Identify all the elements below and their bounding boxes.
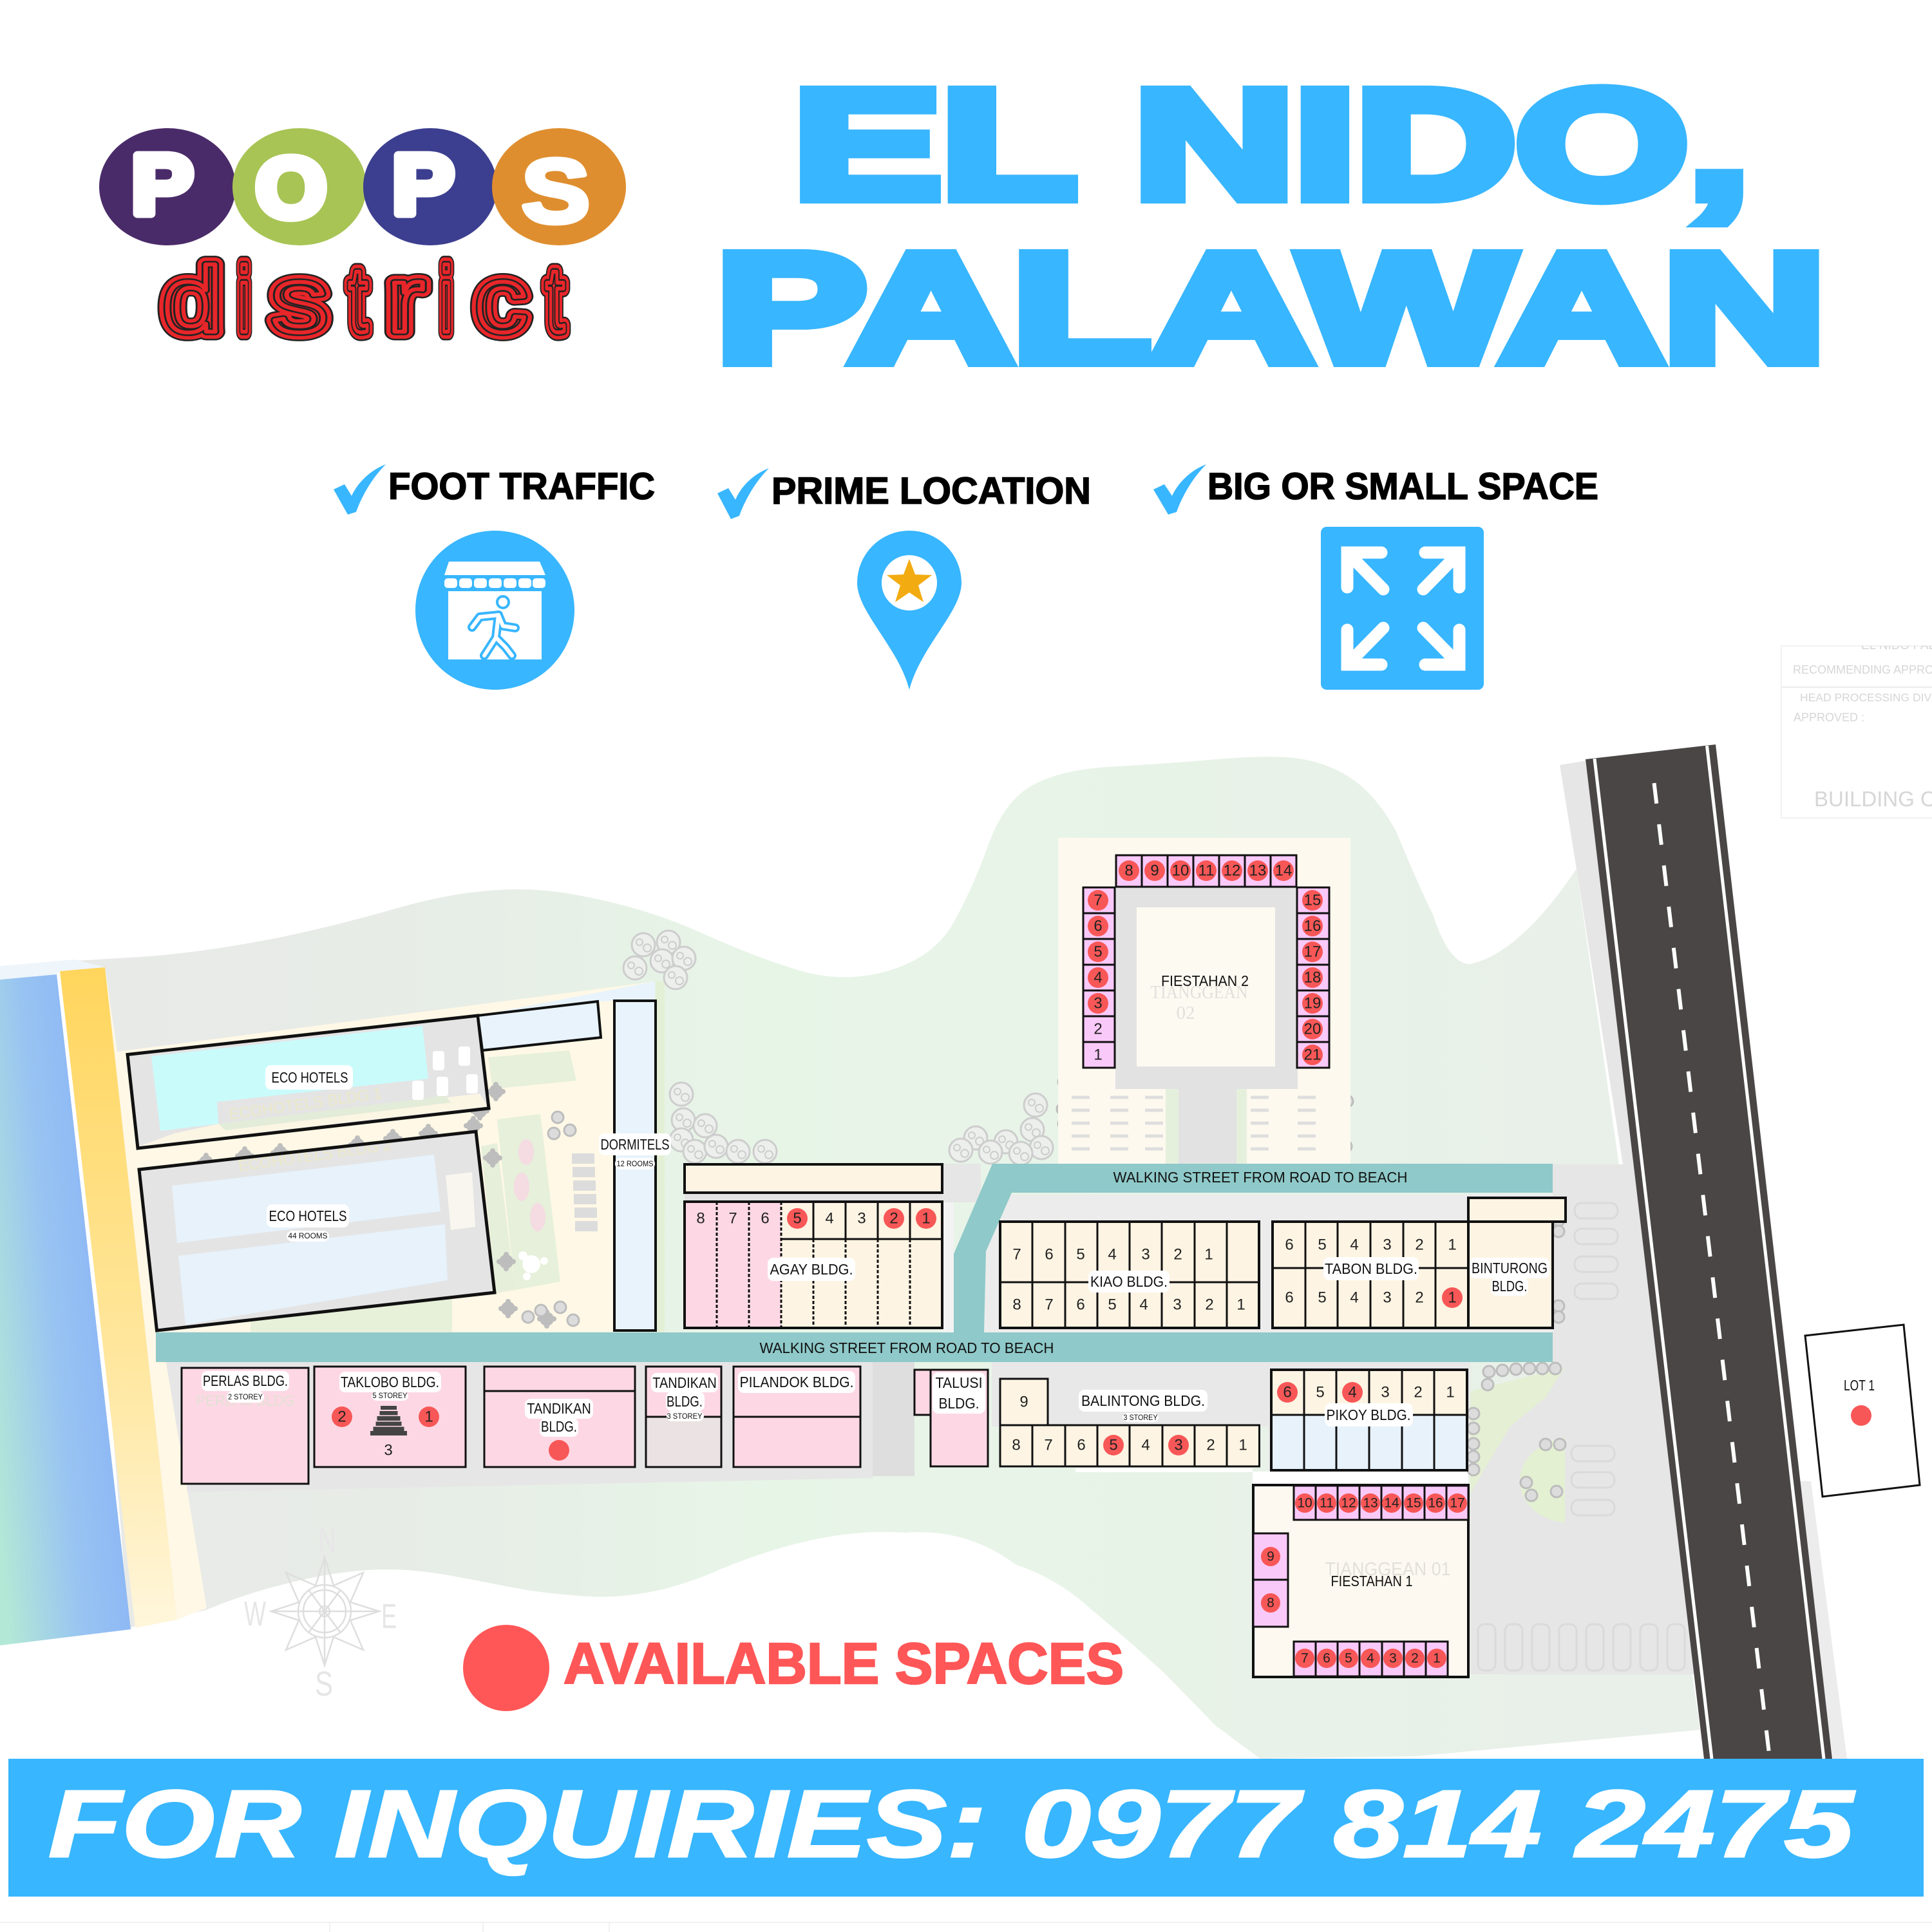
logo word: district: r xyxy=(387,248,424,352)
stalls: top row 8-14: 14 xyxy=(1275,862,1292,880)
logo word: district: t xyxy=(348,248,368,352)
dormitels xyxy=(599,1001,671,1331)
sand edge xyxy=(105,967,207,1620)
kiao building: 4 xyxy=(1139,1296,1148,1314)
balintong building: 3 STOREY xyxy=(1123,1413,1158,1422)
feature: prime location xyxy=(717,468,1091,690)
kiao building xyxy=(1000,1222,1259,1328)
stalls: left column 9 and 8: 9 xyxy=(1267,1549,1274,1564)
stalls: left column 9 and 8 xyxy=(1253,1533,1288,1627)
stalls: top row 10-17: 17 xyxy=(1450,1495,1465,1511)
tabon building: 3 xyxy=(1383,1289,1392,1306)
icon: stacked storeys xyxy=(370,1406,407,1435)
tabon building: TABON BLDG. xyxy=(1325,1260,1417,1277)
icon: expand arrows xyxy=(1321,527,1484,690)
kiao building: 6 xyxy=(1076,1296,1085,1314)
fiestahan 2: 02 xyxy=(1176,1003,1195,1023)
cream ground: hotels xyxy=(117,981,655,1332)
tandikan building west: TANDIKAN xyxy=(527,1400,591,1417)
kiao building: 8 xyxy=(1012,1296,1021,1314)
agay building: 8 xyxy=(696,1209,705,1227)
beach water xyxy=(0,974,131,1645)
faded title block: APPROVED : xyxy=(1794,711,1864,724)
paved ground: central xyxy=(982,1195,1553,1332)
kiao building: 1 xyxy=(1204,1245,1213,1264)
legend: available spaces: AVAILABLE SPACES xyxy=(564,1632,1124,1696)
tabon building: 3 xyxy=(1383,1236,1392,1253)
kiao building: 3 xyxy=(1173,1296,1182,1314)
eco hotels building 2: ECOHOTELS BLDG 2 xyxy=(237,1136,393,1175)
logo word: district: r xyxy=(387,248,424,352)
stalls: right column 15-21: 20 xyxy=(1304,1020,1321,1038)
paved gap above agay xyxy=(685,1193,942,1202)
dormitels: DORMITELS xyxy=(600,1136,670,1153)
fiestahan 1: FIESTAHAN 1 xyxy=(1331,1573,1413,1589)
pikoy building: 2 xyxy=(1414,1383,1423,1401)
logo word: district: t xyxy=(348,248,368,352)
stalls: bottom row 7-1 xyxy=(1294,1642,1448,1676)
stalls: top row 10-17: 16 xyxy=(1428,1495,1443,1511)
kiao building: KIAO BLDG. xyxy=(1090,1273,1168,1290)
logo word: district: c xyxy=(475,248,527,352)
paved ground: agay side xyxy=(942,1164,981,1202)
perlas building: PERLAS BLDG. xyxy=(203,1372,288,1389)
stalls: top row 8-14: 9 xyxy=(1150,862,1159,880)
compass: E xyxy=(381,1597,397,1636)
dotted strip by agay xyxy=(942,1202,954,1332)
stalls: right column 15-21 xyxy=(1297,887,1329,1068)
agay building: 5 xyxy=(793,1209,802,1227)
logo word: district: t xyxy=(348,248,368,352)
logo word: district: r xyxy=(387,248,424,352)
green patch parking xyxy=(1520,1437,1565,1522)
icon: check mark xyxy=(334,464,386,515)
gap between pikoy and fiestahan 1 xyxy=(1253,1472,1468,1485)
stalls: bottom row 7-1: 5 xyxy=(1345,1651,1352,1665)
stalls: bottom row 7-1: 1 xyxy=(1433,1651,1441,1665)
tandikan building east: TANDIKAN xyxy=(652,1374,717,1391)
logo word: district: c xyxy=(475,248,527,352)
garden benches xyxy=(572,1153,598,1231)
title: El Nido, Palawan: PALAWAN xyxy=(716,222,1826,394)
tabon building: 5 xyxy=(1318,1236,1327,1253)
tabon building: 1 xyxy=(1448,1236,1457,1253)
balintong building: 7 xyxy=(1044,1436,1053,1454)
talusi building: BLDG. xyxy=(939,1395,979,1412)
stalls: right column 15-21: 16 xyxy=(1304,917,1321,935)
inquiries banner: 0977 814 2475 xyxy=(1021,1771,1856,1877)
green patch east xyxy=(1470,1367,1565,1494)
icon: store with walker xyxy=(415,531,574,690)
logo word: district: d xyxy=(163,248,222,352)
taklobo building: 1 xyxy=(424,1408,433,1426)
tabon building: 5 xyxy=(1318,1289,1327,1306)
kiao building: 4 xyxy=(1108,1245,1117,1264)
tandikan building east xyxy=(646,1367,721,1467)
kiao building: 5 xyxy=(1108,1296,1117,1314)
logo word: POPS: P xyxy=(392,137,454,232)
stalls: bottom row 7-1: 2 xyxy=(1411,1651,1419,1665)
agay building xyxy=(685,1202,942,1328)
inquiries banner: FOR INQUIRIES: xyxy=(48,1771,987,1877)
pikoy building xyxy=(1271,1370,1467,1470)
stalls: bottom row 7-1: 7 xyxy=(1301,1651,1309,1665)
sand xyxy=(60,967,177,1628)
lot 1: LOT 1 xyxy=(1844,1377,1875,1394)
lawn south of hotel xyxy=(251,1294,452,1332)
tabon building: 2 xyxy=(1415,1236,1424,1253)
icon: check mark xyxy=(717,468,769,519)
logo word: district: i xyxy=(440,248,453,352)
balintong building: 1 xyxy=(1238,1436,1247,1454)
logo word: POPS: P xyxy=(131,137,193,232)
stalls: left column 7-1 xyxy=(1083,887,1115,1068)
logo word: district: t xyxy=(545,248,565,352)
fiestahan 2 xyxy=(1058,838,1350,1164)
pikoy building: 4 xyxy=(1348,1383,1357,1401)
lawn small xyxy=(488,1050,576,1089)
pikoy building: PIKOY BLDG. xyxy=(1327,1406,1410,1423)
pikoy building: 1 xyxy=(1446,1383,1455,1401)
brick walkway xyxy=(873,1362,914,1476)
faint footer rule xyxy=(0,1922,1932,1932)
binturong building: BINTURONG xyxy=(1472,1260,1548,1276)
agay building: 3 xyxy=(857,1209,866,1227)
walking street: upper: WALKING STREET FROM ROAD TO BEACH xyxy=(1113,1169,1408,1186)
feature: big or small space xyxy=(1153,464,1598,690)
perlas building xyxy=(182,1368,308,1484)
heading: big or small space: BIG OR SMALL SPACE xyxy=(1208,466,1598,507)
fiestahan 1 xyxy=(1253,1485,1468,1677)
kiao building: 2 xyxy=(1205,1296,1214,1314)
perlas building: 2 STOREY xyxy=(228,1392,263,1401)
logo word: district: i xyxy=(440,248,453,352)
stalls: left column 7-1: 5 xyxy=(1094,943,1103,961)
balintong building: 2 xyxy=(1206,1436,1215,1454)
logo word: POPS: S xyxy=(522,140,590,242)
stalls: left column 7-1: 3 xyxy=(1094,994,1103,1012)
pale blue strip xyxy=(478,981,655,1050)
tabon building: 6 xyxy=(1285,1289,1294,1306)
eco hotels building 2: 44 ROOMS xyxy=(289,1231,327,1240)
stalls: top row 8-14: 11 xyxy=(1198,862,1214,880)
stalls: top row 10-17: 13 xyxy=(1363,1495,1378,1511)
lot 1 xyxy=(1805,1325,1920,1497)
garden pink beds xyxy=(514,1139,545,1231)
agay building: 2 xyxy=(889,1209,898,1227)
logo word: district: i xyxy=(238,248,251,352)
tabon building: 4 xyxy=(1350,1236,1359,1253)
talusi building: TALUSI xyxy=(935,1374,983,1391)
stalls: top row 10-17: 14 xyxy=(1384,1495,1399,1511)
heading: foot traffic: FOOT TRAFFIC xyxy=(388,466,655,507)
inquiries banner xyxy=(8,1759,1924,1897)
stalls: right column 15-21: 15 xyxy=(1304,891,1321,909)
agay building: 6 xyxy=(761,1209,770,1227)
logo word: district: t xyxy=(545,248,565,352)
road xyxy=(1586,744,1832,1759)
paved ground: behind pikoy xyxy=(1269,1362,1470,1472)
fiestahan 2: FIESTAHAN 2 xyxy=(1161,972,1249,989)
walkway strip south xyxy=(1075,1468,1253,1472)
balintong building: 4 xyxy=(1141,1436,1150,1454)
logo word: district: c xyxy=(475,248,527,352)
logo word: district: i xyxy=(440,248,453,352)
logo word: district xyxy=(163,248,565,352)
perlas building: PERLAS BLDG xyxy=(196,1392,294,1409)
eco hotels building 2: ECO HOTELS xyxy=(269,1208,346,1224)
stalls: top row 10-17: 11 xyxy=(1320,1495,1334,1511)
stalls: bottom row 7-1: 4 xyxy=(1367,1651,1374,1665)
garden white circles xyxy=(518,1251,548,1280)
fiestahan 2: TIANGGEAN xyxy=(1150,982,1248,1003)
logo word: district: s xyxy=(272,248,327,352)
eco hotels building 1: ECO HOTELS xyxy=(272,1069,348,1086)
eco hotels building 1: ECOHOTELS BLDG 1 xyxy=(227,1084,383,1124)
agay building: 7 xyxy=(728,1209,737,1227)
balintong building: 8 xyxy=(1012,1436,1021,1454)
tandikan building east: BLDG. xyxy=(667,1393,703,1410)
taklobo building: 3 xyxy=(384,1441,393,1459)
balintong building: 6 xyxy=(1077,1436,1086,1454)
agay building: 4 xyxy=(825,1209,834,1227)
icon: check mark xyxy=(1153,464,1206,515)
tandikan building east: 3 STOREY xyxy=(667,1412,702,1421)
agay building: AGAY BLDG. xyxy=(770,1261,853,1278)
tandikan building west: BLDG. xyxy=(541,1418,577,1435)
kiao building: 1 xyxy=(1236,1296,1245,1314)
stalls: top row 10-17: 15 xyxy=(1406,1495,1421,1511)
stalls: left column 9 and 8: 8 xyxy=(1267,1596,1274,1610)
taklobo building: 5 STOREY xyxy=(372,1391,407,1400)
talusi building xyxy=(914,1370,988,1466)
stalls: right column 15-21: 21 xyxy=(1304,1046,1321,1064)
compass xyxy=(244,1521,397,1703)
stalls: top row 8-14: 8 xyxy=(1124,862,1133,880)
logo word: district: i xyxy=(238,248,251,352)
logo word: district: t xyxy=(545,248,565,352)
icon: map pin with star xyxy=(857,531,961,690)
kiao building: 6 xyxy=(1045,1245,1054,1264)
balintong building: 3 xyxy=(1174,1436,1183,1454)
stalls: right column 15-21: 19 xyxy=(1304,994,1321,1012)
logo word: district: t xyxy=(545,248,565,352)
logo word: district: i xyxy=(440,248,453,352)
stalls: left column 7-1: 7 xyxy=(1094,891,1103,909)
stalls: top row 10-17: 10 xyxy=(1297,1495,1312,1511)
taklobo building: 2 xyxy=(337,1408,346,1426)
paved ground: south row xyxy=(164,1362,873,1492)
logo word: district: c xyxy=(475,248,527,352)
stalls: bottom row 7-1: 6 xyxy=(1323,1651,1331,1665)
compass: W xyxy=(244,1595,266,1633)
heading: prime location: PRIME LOCATION xyxy=(772,470,1091,512)
taklobo building xyxy=(314,1367,466,1467)
lawn xyxy=(497,1114,560,1290)
tabon building: 2 xyxy=(1415,1289,1424,1306)
parking bays: lower xyxy=(1478,1624,1685,1671)
balintong building: BALINTONG BLDG. xyxy=(1081,1392,1205,1409)
compass: S xyxy=(315,1665,333,1703)
kiao building: 2 xyxy=(1173,1245,1182,1264)
stalls: left column 7-1: 2 xyxy=(1094,1020,1103,1038)
pale green strip by dormitels xyxy=(656,981,665,1332)
stalls: top row 10-17: 12 xyxy=(1341,1495,1356,1511)
tabon building: 6 xyxy=(1285,1236,1294,1253)
tabon building xyxy=(1273,1222,1468,1328)
binturong building xyxy=(1468,1198,1566,1328)
stalls: right column 15-21: 17 xyxy=(1304,943,1321,961)
stalls: left column 7-1: 1 xyxy=(1094,1046,1103,1064)
kiao building: 3 xyxy=(1141,1245,1150,1264)
title: El Nido, Palawan xyxy=(716,58,1826,394)
logo word: district: d xyxy=(163,248,222,352)
logo word: district: d xyxy=(163,248,222,352)
logo word: district: s xyxy=(272,248,327,352)
feature: foot traffic xyxy=(334,464,655,690)
parking bays: upper xyxy=(1571,1203,1618,1515)
binturong building: BLDG. xyxy=(1492,1278,1528,1294)
paved ground: balintong xyxy=(992,1362,1273,1426)
kiao building: 7 xyxy=(1045,1296,1054,1314)
site plan map xyxy=(0,744,1920,1759)
faded title block xyxy=(1781,639,1932,818)
eco hotels building 2 xyxy=(139,1132,495,1331)
paved strip east of road xyxy=(1797,1481,1847,1759)
stalls: left column 7-1: 6 xyxy=(1094,917,1103,935)
logo word: POPS xyxy=(131,137,590,242)
agay building: 1 xyxy=(922,1209,931,1227)
stalls: top row 10-17 xyxy=(1294,1486,1468,1520)
walking street: main xyxy=(156,1332,1553,1362)
compass: N xyxy=(318,1521,336,1560)
balintong building xyxy=(1000,1379,1260,1466)
paved ground: road side xyxy=(1470,760,1707,1674)
stalls: top row 8-14: 12 xyxy=(1224,862,1240,880)
logo ovals xyxy=(99,128,626,245)
balintong building: 9 xyxy=(1019,1394,1028,1410)
title: El Nido, Palawan: EL NIDO, xyxy=(793,58,1750,231)
kiao building: 5 xyxy=(1076,1245,1085,1264)
agay annex xyxy=(685,1164,942,1193)
taklobo building: TAKLOBO BLDG. xyxy=(341,1374,439,1390)
tabon building: 4 xyxy=(1350,1289,1359,1306)
logo word: district: r xyxy=(387,248,424,352)
eco hotels building 1 xyxy=(128,1016,489,1148)
stalls: top row 8-14: 10 xyxy=(1172,862,1189,880)
pikoy building: 5 xyxy=(1316,1383,1325,1401)
walking street: main: WALKING STREET FROM ROAD TO BEACH xyxy=(760,1340,1054,1356)
stalls: left column 7-1: 4 xyxy=(1094,969,1103,987)
logo word: district: t xyxy=(348,248,368,352)
pikoy building: 3 xyxy=(1381,1383,1390,1401)
legend: available spaces xyxy=(463,1625,1124,1711)
eco hotels annex xyxy=(478,1001,601,1050)
logo word: district: i xyxy=(238,248,251,352)
fiestahan 1: TIANGGEAN 01 xyxy=(1325,1559,1450,1580)
tandikan building west xyxy=(484,1367,635,1467)
logo: Pops District xyxy=(99,128,626,352)
pilandok building xyxy=(734,1367,860,1467)
dotted lawn by hotel xyxy=(481,1143,515,1293)
logo word: district: s xyxy=(272,248,327,352)
logo word: district: i xyxy=(238,248,251,352)
kiao building: 7 xyxy=(1012,1245,1021,1264)
stalls: bottom row 7-1: 3 xyxy=(1389,1651,1397,1665)
stalls: right column 15-21: 18 xyxy=(1304,969,1321,987)
balintong building: 5 xyxy=(1109,1436,1118,1454)
logo word: POPS: O xyxy=(256,140,327,235)
tabon building: 1 xyxy=(1448,1289,1457,1306)
logo word: district: s xyxy=(272,248,327,352)
walking street: upper xyxy=(954,1164,1553,1332)
stalls: top row 8-14: 13 xyxy=(1249,862,1266,880)
land background xyxy=(75,757,1700,1759)
trees and planting xyxy=(196,931,1566,1501)
pikoy building: 6 xyxy=(1283,1383,1292,1401)
motorbike parking marks xyxy=(1072,1097,1316,1149)
pilandok building: PILANDOK BLDG. xyxy=(739,1374,854,1390)
stalls: top row 8-14 xyxy=(1116,855,1296,887)
pale band at shore xyxy=(0,960,105,980)
logo word: district: d xyxy=(163,248,222,352)
dormitels: 12 ROOMS xyxy=(617,1159,653,1168)
